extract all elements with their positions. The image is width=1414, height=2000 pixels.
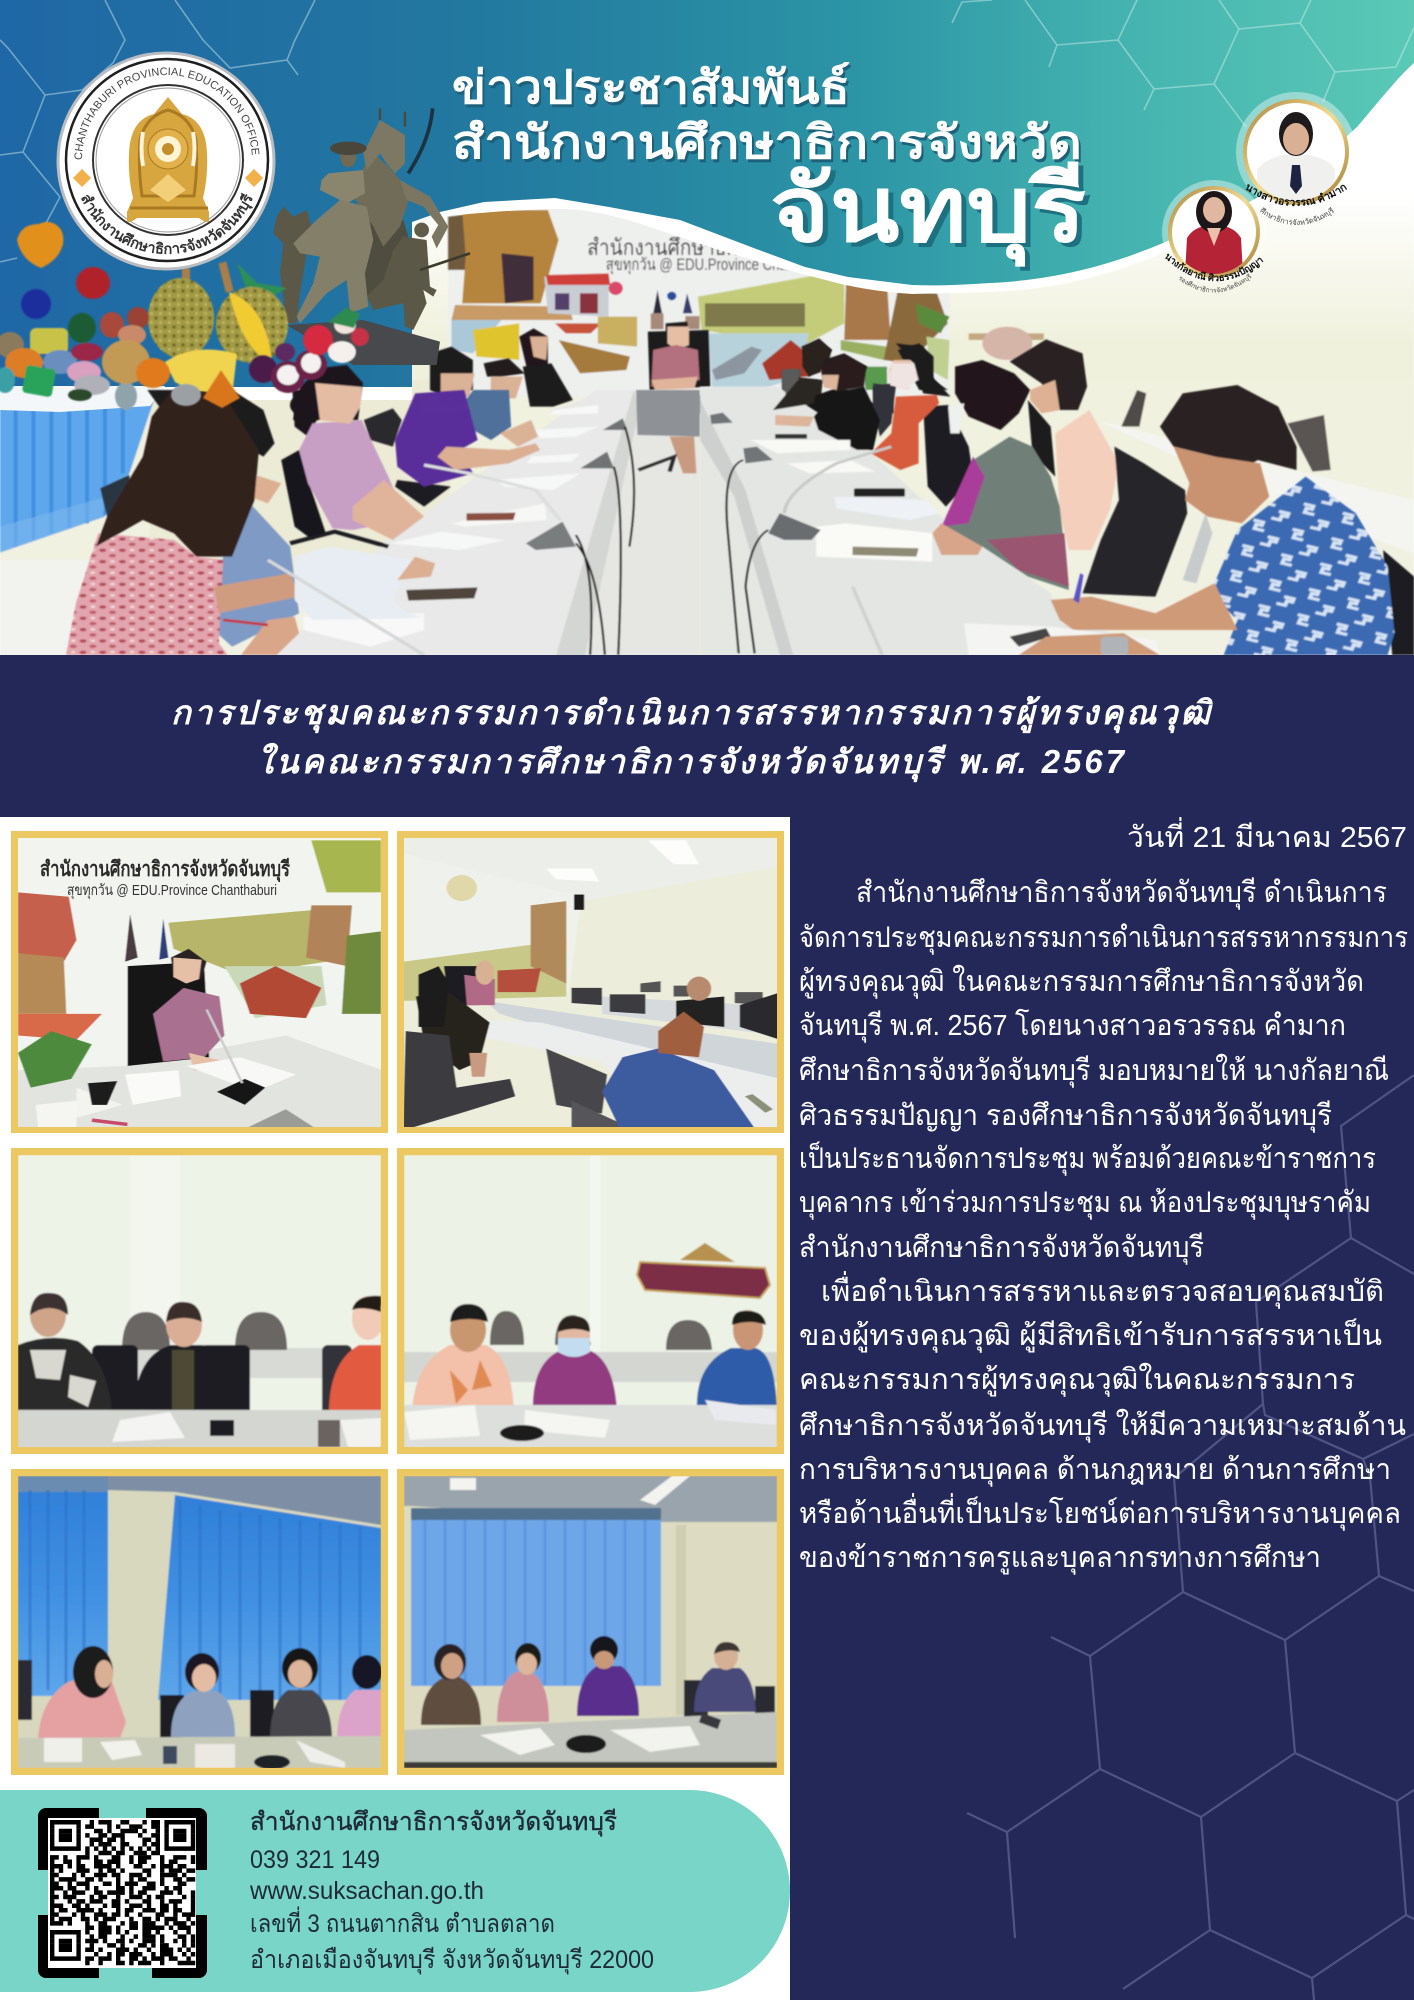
paragraph one: สำนักงานศึกษาธิการจังหวัดจันทบุรี [799,1232,1204,1265]
logo bottom text: สำนักงานศึกษาธิการจังหวัดจันทบุรี [81,192,253,254]
contact details: อำเภอเมืองจันทบุรี จังหวัดจันทบุรี 22000 [250,1946,654,1975]
title: three-line heading [452,61,1086,267]
logo: Chanthaburi Provincial Education Office seal [56,52,276,270]
left table [277,390,634,657]
person: black blouse woman [775,355,880,450]
contact details: เลขที่ 3 ถนนตากสิน ตำบลตลาด [250,1906,555,1938]
fruit [100,312,124,338]
flowers and back chairs [969,327,1414,553]
banner: blue-teal gradient with white wave [0,0,1414,400]
mural wall [448,200,950,397]
caption: officer title: ศึกษาธิการจังหวัดจันทบุรี [1260,206,1334,225]
paragraph two: ศึกษาธิการจังหวัดจันทบุรี ให้มีความเหมาะสมด้าน [799,1408,1406,1443]
center woman [648,322,710,390]
paragraph two: ของข้าราชการครูและบุคลากรทางการศึกษา [799,1542,1321,1575]
photo 3: three seated women [11,1148,388,1454]
paragraph two: ของผู้ทรงคุณวุฒิ ผู้มีสิทธิเข้ารับการสรรหาเป็น [799,1317,1382,1353]
contact details [249,1808,654,1975]
person: pink floral woman [66,390,299,655]
person: peach shirt man [1010,339,1119,550]
horse body [343,220,413,320]
caption: deputy name: นางกัลยาณี ศิวธรรมปัญญา [1165,254,1264,282]
emblem: gold dharma wheel [127,97,209,222]
persons on far right side [773,338,948,413]
papers, phones and mics on right table [710,413,939,655]
portrait: deputy officer [1162,180,1264,292]
title line 3: จันทบุรี [770,159,1086,267]
sword [408,108,433,173]
person: second woman hair and blue dress [100,390,299,647]
contact details: www.suksachan.go.th [249,1877,484,1905]
paragraph two: การบริหารงานบุคคล ด้านกฎหมาย ด้านการศึกษา [799,1454,1391,1487]
paragraph two: หรือด้านอื่นที่เป็นประโยชน์ต่อการบริหารงานบุคคล [799,1493,1401,1531]
hero photo: left seating row [66,390,700,657]
podium and chair base [636,390,700,437]
seat row chairs [782,368,800,400]
wall sign text: สำนักงานศึกษาธิการจังหวัด [587,235,816,260]
person: purple shirt head [430,347,475,400]
paragraph two [799,1271,1406,1575]
right man [367,223,437,330]
hero photo: right seating row [700,339,1414,655]
article text [799,817,1408,1575]
navy heading band [0,655,1414,817]
photo 1: chair at mural [11,831,388,1133]
person: lilac blouse head [290,365,363,424]
rider [320,170,365,203]
left man [273,207,312,323]
person: far woman [773,340,832,410]
right table [700,387,1155,655]
microphones and stems [424,418,634,655]
hero photo background: walls, mural and center table [0,190,1414,660]
pedestal [287,320,440,365]
papers, phones on table [391,405,598,601]
person: orange blouse woman [871,343,950,470]
white tablecloth band [0,386,165,412]
photo 5: women before blue curtains [11,1469,388,1775]
horse ears [380,108,405,127]
person: plaid blouse woman [932,360,1069,590]
center man [293,200,373,323]
mangosteen and rambutan [249,355,277,383]
title line 2: สำนักงานศึกษาธิการจังหวัด [452,116,1082,168]
chair and person: purple shirt body [364,390,540,507]
paragraph two: คณะกรรมการผู้ทรงคุณวุฒิในคณะกรรมการ [799,1362,1355,1397]
photo 2: meeting room wide [397,831,784,1133]
date: วันที่ 21 มีนาคม 2567 [1127,817,1407,854]
event heading [171,694,1213,783]
photo 4: man, woman and man with sign [397,1148,784,1454]
person: blue shirt head [484,358,525,398]
person: batik shirt man [964,385,1414,655]
portrait: education officer [1236,92,1352,225]
leaves [237,263,287,300]
caption: officer name: นางสาวอรวรรณ คำมาก [1246,184,1348,206]
logo top text: CHANTHABURI PROVINCIAL EDUCATION OFFICE [74,67,260,160]
caption: deputy title: รองศึกษาธิการจังหวัดจันทบุรี [1180,273,1252,292]
banner hexagon line pattern [0,0,1414,262]
table side and floor [556,390,700,657]
statue: King Taksin monument [273,108,470,365]
right navy column [790,817,1414,2000]
wall sign text: สำนักงานศึกษาธิการจังหวัดจันทบุรี [40,857,291,883]
chair and person: pink-lilac blouse [281,390,424,547]
horse forelegs [400,180,448,248]
wall slogan text: สุขทุกวัน @ EDU.Province Chanthaburi [67,882,277,900]
horse head [363,120,405,173]
person: blue shirt body [460,390,538,447]
gems [17,222,63,268]
wall slogan text: สุขทุกวัน @ EDU.Province Chanthaburi [606,255,834,275]
head table people: center and far seats [430,322,948,413]
paragraph one: ศิวธรรมปัญญา รองศึกษาธิการจังหวัดจันทบุรี [799,1100,1332,1133]
paragraph two: เพื่อดำเนินการสรรหาและตรวจสอบคุณสมบัติ [821,1271,1384,1309]
person: purple shirt shoulders [420,393,470,415]
event heading line 2: ในคณะกรรมการศึกษาธิการจังหวัดจันทบุรี พ.ศ. 2567 [257,742,1127,783]
contact panel: teal pill [0,1790,790,1992]
fruit and gem cluster [0,222,369,410]
curtain [0,400,154,657]
paragraph one [799,877,1408,1265]
QR code [38,1808,207,1978]
wooden sign [637,1262,770,1298]
title line 1: ข่าวประชาสัมพันธ์ [452,61,850,113]
event heading line 1: การประชุมคณะกรรมการดำเนินการสรรหากรรมการผู้ทรงคุณวุฒิ [171,694,1213,734]
durian [148,278,214,358]
hexagon pattern in right column [967,1075,1414,2000]
paragraph one: ผู้ทรงคุณวุฒิ ในคณะกรรมการศึกษาธิการจังหวัด [799,964,1364,999]
horse neck [353,150,410,247]
papers and hands near woman [223,547,435,655]
chair: batik man seat [1083,447,1187,597]
person: dark floral blouse [519,328,573,407]
logo diamonds [73,169,263,187]
far table top [551,393,787,413]
paragraph one: จันทบุรี พ.ศ. 2567 โดยนางสาวอรวรรณ คำมาก [799,1008,1346,1043]
contact details: สำนักงานศึกษาธิการจังหวัดจันทบุรี [250,1808,617,1837]
contact details: 039 321 149 [250,1846,380,1874]
photo 6: four seated before curtain [397,1469,784,1775]
